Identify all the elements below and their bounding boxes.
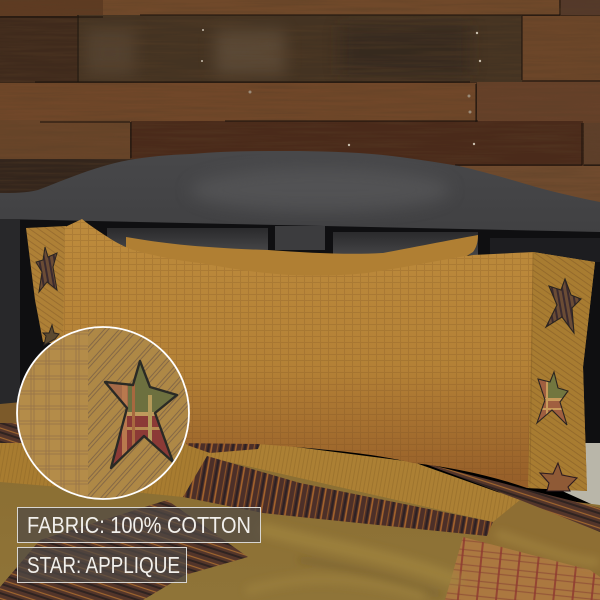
- lens: cuff section: [88, 325, 193, 500]
- pillow back: [126, 235, 478, 285]
- dark stripe behind pillow edge: [185, 440, 262, 453]
- lens: applique star: [104, 360, 178, 470]
- pillow front: [63, 219, 600, 495]
- quilt: [0, 402, 600, 600]
- label: fabric: [18, 508, 260, 542]
- wood plank wall: [0, 0, 600, 202]
- star: left lower: [43, 325, 59, 345]
- headboard: [0, 151, 600, 508]
- label: star: STAR: APPLIQUE: [27, 552, 180, 578]
- star: right bottom: [540, 463, 577, 491]
- star: right top: [546, 279, 581, 333]
- star: right middle: [536, 370, 569, 426]
- callout: zoom lens of fabric: [15, 325, 193, 500]
- quilt: dark patch bottom left: [0, 500, 248, 600]
- star: left top: [36, 247, 57, 292]
- pillow left cuff: [26, 226, 66, 345]
- quilt: gold patch centre: [207, 442, 520, 522]
- quilt: dark stripe band centre: [183, 456, 493, 536]
- quilt: tan band right: [463, 500, 600, 580]
- headboard panels: [107, 226, 600, 262]
- quilt: gold patch left: [0, 443, 213, 497]
- lens: plain weave section: [15, 325, 88, 500]
- quilt: soft ridges: [250, 530, 595, 595]
- label: star: [18, 548, 186, 582]
- quilt: red plaid patch: [445, 537, 600, 600]
- label: fabric: FABRIC: 100% COTTON: [27, 512, 251, 538]
- floor right: [560, 443, 600, 508]
- pillow right cuff: [528, 252, 595, 491]
- quilt: left stripes: [0, 420, 45, 443]
- quilt: dark stripe band right: [420, 462, 600, 532]
- bedpost left: [0, 219, 20, 409]
